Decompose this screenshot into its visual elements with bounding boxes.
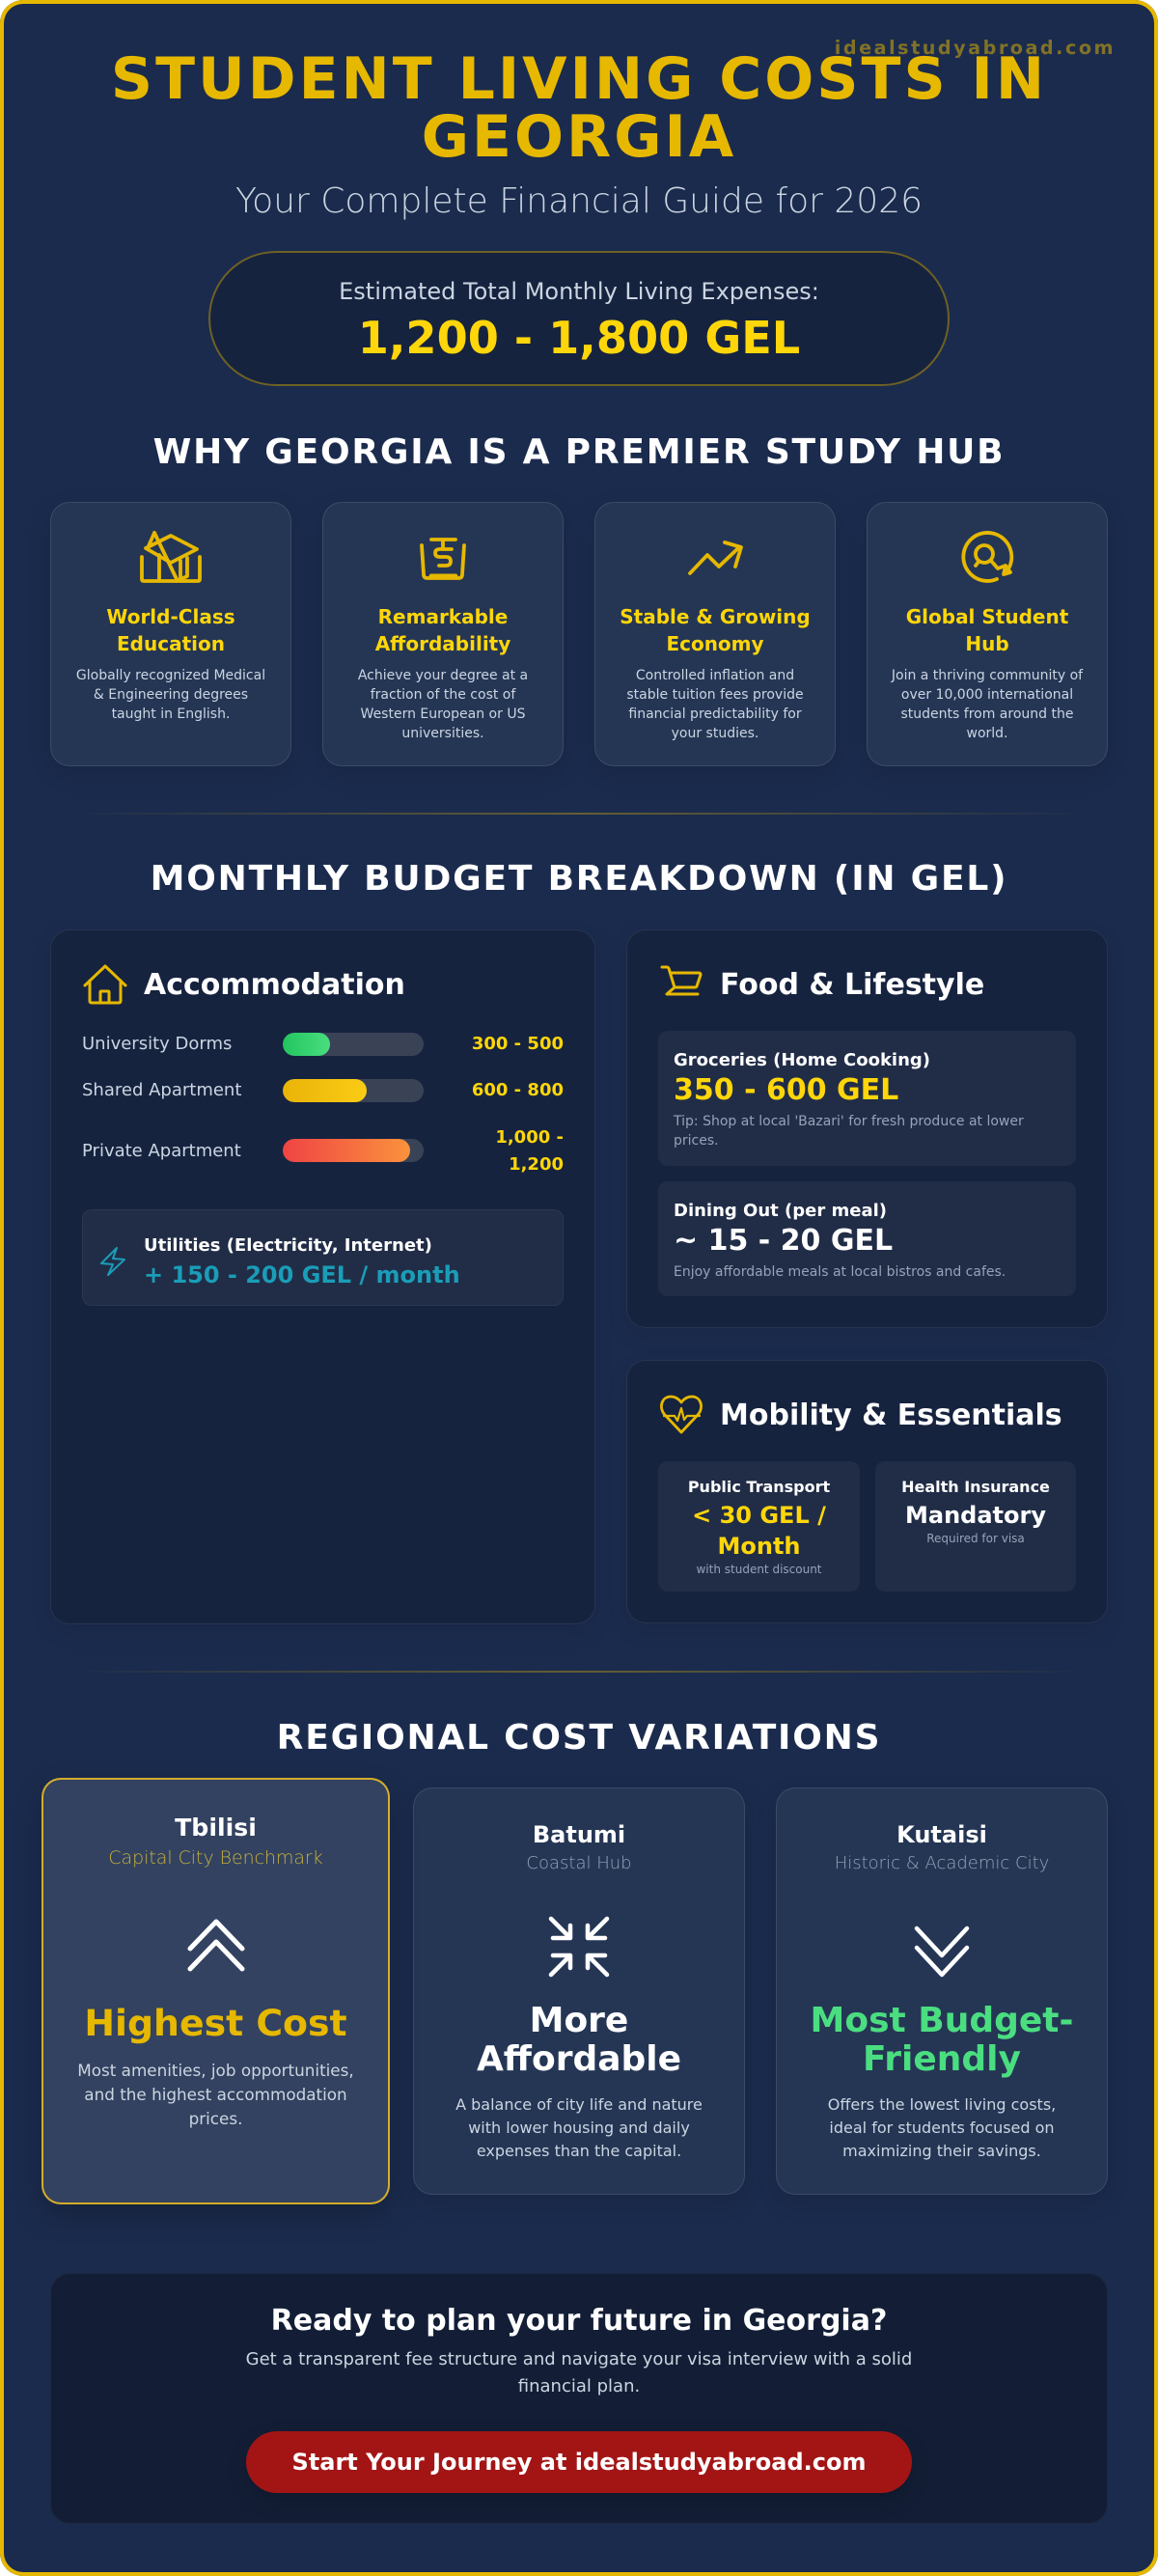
card text <box>76 668 265 722</box>
panel: stable and growing economy <box>594 502 836 766</box>
cost rating <box>811 2000 1073 2079</box>
value: Month <box>717 1533 801 1560</box>
callout label: Estimated Total Monthly Living Expenses: <box>339 278 819 305</box>
cost rating: Most Budget- <box>811 2000 1073 2040</box>
cta text: financial plan. <box>518 2376 640 2396</box>
card title: Remarkable <box>378 605 508 628</box>
tip: Tip: Shop at local 'Bazari' for fresh produce at lower <box>674 1114 1024 1129</box>
bar <box>283 1139 424 1162</box>
card text <box>358 668 528 741</box>
total cost callout <box>208 251 950 386</box>
tip <box>674 1114 1024 1149</box>
card title: Economy <box>666 632 764 655</box>
label: Groceries (Home Cooking) <box>674 1050 930 1070</box>
card text <box>626 668 804 741</box>
value <box>495 1127 564 1175</box>
cost rating: Friendly <box>863 2038 1021 2079</box>
heading: monthly budget: MONTHLY BUDGET BREAKDOWN (IN GEL) <box>151 859 1007 899</box>
card text: Achieve your degree at a <box>358 668 528 683</box>
city text: maximizing their savings. <box>842 2142 1041 2160</box>
icon: heart pulse <box>660 1396 703 1434</box>
icon: money <box>420 538 466 580</box>
cost rating: More <box>530 2000 628 2040</box>
utilities box <box>82 1209 564 1306</box>
icon: student globe <box>961 531 1013 583</box>
card text: Globally recognized Medical <box>76 668 265 683</box>
panel: accommodation <box>50 929 595 1624</box>
icon: bolt <box>100 1247 125 1276</box>
card title <box>906 605 1068 655</box>
cta button <box>246 2431 912 2493</box>
panel: kutaisi <box>776 1787 1108 2195</box>
watermark: idealstudyabroad.com <box>835 37 1116 59</box>
card title <box>620 605 811 655</box>
city text: expenses than the capital. <box>477 2142 681 2160</box>
city descriptor: Capital City Benchmark <box>108 1847 323 1869</box>
value: ~ 15 - 20 GEL <box>674 1224 893 1258</box>
value <box>692 1502 826 1560</box>
icon: trending arrow <box>688 540 743 575</box>
panel title: Food & Lifestyle <box>720 967 984 1002</box>
card text: universities. <box>401 726 484 741</box>
value: 1,200 <box>509 1154 564 1175</box>
label: Public Transport <box>688 1478 830 1496</box>
box: public transport <box>658 1461 860 1592</box>
title: GEORGIA <box>422 103 736 171</box>
value: < 30 GEL / <box>692 1502 826 1529</box>
card title: Affordability <box>375 632 510 655</box>
city text: with lower housing and daily <box>468 2119 690 2137</box>
city descriptor: Coastal Hub <box>526 1853 632 1873</box>
row: shared apartment <box>82 1079 564 1102</box>
heading: why georgia: WHY GEORGIA IS A PREMIER STUDY HUB <box>153 432 1005 472</box>
note: with student discount <box>696 1563 822 1576</box>
icon: converging arrows <box>548 1917 610 1977</box>
card title: Stable & Growing <box>620 605 811 628</box>
note: Required for visa <box>926 1532 1025 1545</box>
card text: stable tuition fees provide <box>626 687 804 703</box>
card title: Global Student <box>906 605 1068 628</box>
card text: students from around the <box>901 706 1073 722</box>
card title <box>374 605 510 655</box>
city descriptor: Historic & Academic City <box>835 1853 1049 1873</box>
label: Health Insurance <box>901 1478 1050 1496</box>
card text <box>891 668 1083 741</box>
panel: mobility and essentials <box>626 1360 1108 1623</box>
utilities value: + 150 - 200 GEL / month <box>144 1260 460 1288</box>
icon: house <box>83 964 127 1004</box>
bar <box>283 1079 424 1102</box>
city text <box>828 2095 1056 2160</box>
label: Shared Apartment <box>82 1080 241 1100</box>
card title <box>106 605 235 655</box>
cta text <box>246 2349 912 2396</box>
cta heading: Ready to plan your future in Georgia? <box>271 2304 887 2338</box>
note: Enjoy affordable meals at local bistros and cafes. <box>674 1264 1006 1280</box>
value: 350 - 600 GEL <box>674 1073 898 1107</box>
city name: Batumi <box>533 1821 625 1848</box>
city name: Tbilisi <box>175 1813 257 1842</box>
card text: your studies. <box>672 726 758 741</box>
city text: ideal for students focused on <box>829 2119 1055 2137</box>
value: 600 - 800 <box>472 1080 564 1100</box>
value: 300 - 500 <box>472 1034 564 1054</box>
card text: taught in English. <box>112 706 230 722</box>
box: health insurance <box>875 1461 1076 1592</box>
card text: financial predictability for <box>628 706 802 722</box>
city text: prices. <box>189 2109 242 2128</box>
city text: and the highest accommodation <box>84 2085 347 2104</box>
panel: tbilisi <box>41 1778 390 2204</box>
card text: Western European or US <box>361 706 525 722</box>
card text: fraction of the cost of <box>371 687 515 703</box>
label: Private Apartment <box>82 1141 241 1161</box>
heading: regional costs: REGIONAL COST VARIATIONS <box>277 1718 881 1758</box>
card text: Controlled inflation and <box>636 668 794 683</box>
panel: world-class education <box>50 502 291 766</box>
cost rating: Highest Cost <box>84 2002 347 2044</box>
panel: batumi <box>413 1787 745 2195</box>
title: STUDENT LIVING COSTS IN <box>111 45 1047 113</box>
icon: double chevron up <box>187 1919 245 1971</box>
card text: world. <box>967 726 1007 741</box>
cost rating: Affordable <box>477 2038 681 2079</box>
city text: Offers the lowest living costs, <box>828 2095 1056 2114</box>
card title: Education <box>117 632 225 655</box>
call to action <box>50 2273 1108 2524</box>
city text: A balance of city life and nature <box>455 2095 703 2114</box>
value: 1,000 - <box>495 1127 564 1148</box>
card text: over 10,000 international <box>901 687 1073 703</box>
city text: Most amenities, job opportunities, <box>77 2061 354 2080</box>
box: dining out <box>658 1181 1076 1296</box>
cta text: Get a transparent fee structure and navigate your visa interview with a solid <box>246 2349 912 2369</box>
callout value: 1,200 - 1,800 GEL <box>358 312 800 364</box>
panel: food and lifestyle <box>626 929 1108 1328</box>
bar <box>283 1033 424 1056</box>
icon: double chevron down <box>915 1926 969 1977</box>
panel title: Accommodation <box>144 967 405 1002</box>
card text: Join a thriving community of <box>892 668 1083 683</box>
city text <box>455 2095 703 2160</box>
row: university dorms <box>82 1033 564 1056</box>
row: private apartment <box>82 1127 564 1175</box>
tip: prices. <box>674 1133 719 1149</box>
subtitle: Your Complete Financial Guide for 2026 <box>235 181 923 221</box>
panel title: Mobility & Essentials <box>720 1398 1062 1432</box>
panel: remarkable affordability <box>322 502 564 766</box>
label: Dining Out (per meal) <box>674 1201 887 1220</box>
box: groceries <box>658 1031 1076 1166</box>
label: University Dorms <box>82 1034 232 1054</box>
icon: cart <box>660 965 703 996</box>
value: Mandatory <box>905 1502 1046 1529</box>
card title: World-Class <box>106 605 235 628</box>
card text: & Engineering degrees <box>94 687 248 703</box>
card title: Hub <box>965 632 1009 655</box>
city text <box>77 2061 354 2128</box>
panel: global student hub <box>867 502 1108 766</box>
utilities label: Utilities (Electricity, Internet) <box>144 1235 432 1256</box>
cost rating <box>477 2000 681 2079</box>
title <box>111 45 1047 171</box>
city name: Kutaisi <box>896 1821 987 1848</box>
icon: graduation cap <box>140 531 202 583</box>
cta button: Start Your Journey at idealstudyabroad.com <box>291 2449 866 2476</box>
